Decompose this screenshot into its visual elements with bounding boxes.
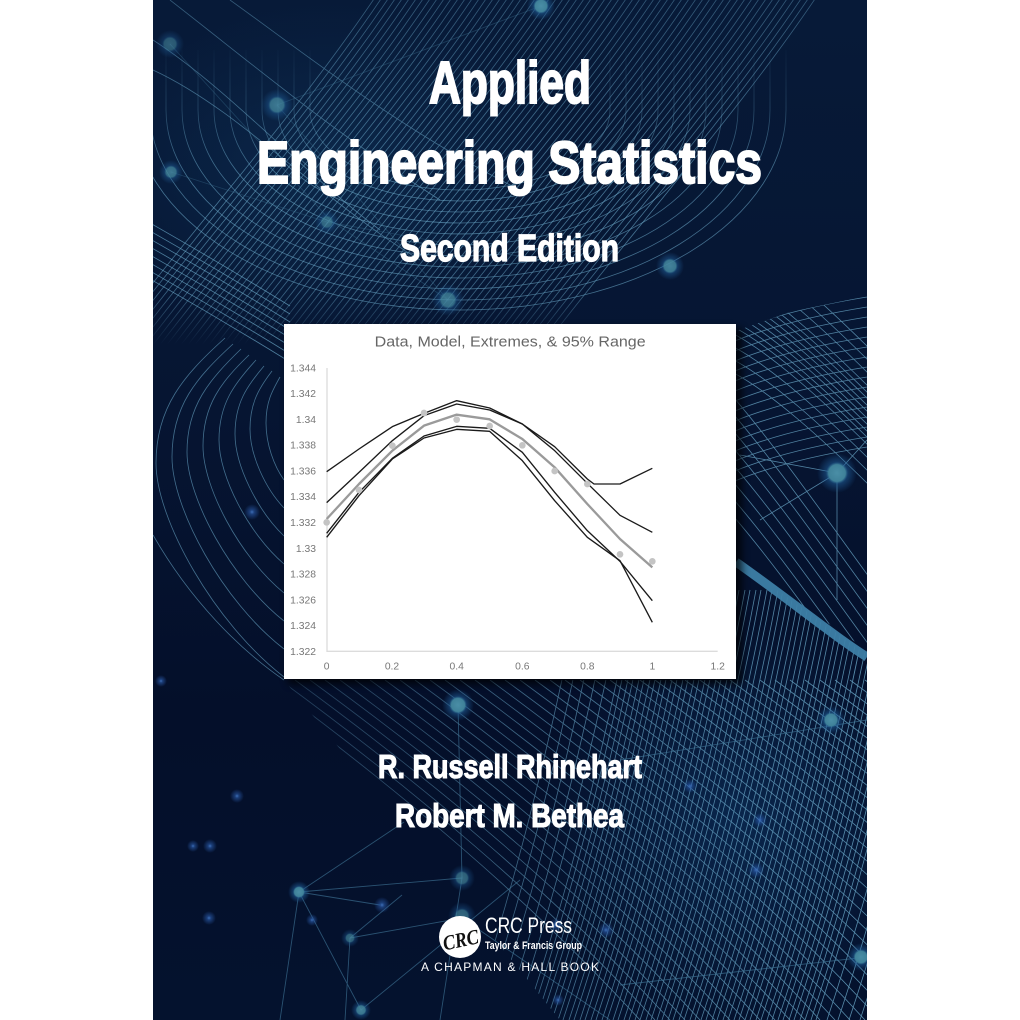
bottom right mesh — [289, 590, 867, 1020]
publisher logo: CRC Press — [485, 913, 572, 938]
y axis labels: 1.33 — [296, 544, 316, 555]
y axis labels: 1.344 — [290, 363, 316, 374]
x axis labels: 0.8 — [580, 662, 595, 673]
y axis labels: 1.342 — [290, 389, 316, 400]
title — [257, 50, 762, 196]
x axis labels: 0 — [324, 662, 330, 673]
chart title: Data, Model, Extremes, & 95% Range — [375, 335, 646, 351]
subtitle: second edition: Second Edition — [400, 228, 619, 270]
y axis labels: 1.322 — [290, 647, 316, 658]
glowing nodes — [155, 0, 875, 1020]
authors: Robert M. Bethea — [395, 797, 625, 834]
x axis labels: 0.4 — [449, 662, 464, 673]
left curved lines — [153, 338, 284, 680]
concentric arcs — [134, 50, 786, 310]
y axis labels: 1.332 — [290, 518, 316, 529]
right mesh — [736, 296, 867, 643]
publisher logo: CRC — [441, 924, 482, 955]
y axis labels: 1.336 — [290, 466, 316, 477]
y axis labels: 1.328 — [290, 569, 316, 580]
network lines — [280, 705, 867, 1020]
axes — [327, 368, 718, 651]
panel: line chart — [284, 324, 742, 684]
authors: R. Russell Rhinehart — [378, 748, 642, 785]
publisher logo — [421, 913, 599, 974]
y axis labels: 1.324 — [290, 621, 316, 632]
x axis labels: 0.2 — [385, 662, 399, 673]
right band — [736, 562, 867, 657]
x axis labels: 0.6 — [515, 662, 530, 673]
y axis labels — [290, 363, 316, 658]
y axis labels: 1.338 — [290, 440, 316, 451]
y axis labels: 1.326 — [290, 595, 316, 606]
fan above left of chart — [153, 224, 290, 359]
authors — [378, 748, 642, 834]
data points — [323, 410, 656, 565]
x axis labels: 1.2 — [710, 662, 725, 673]
publisher logo: A CHAPMAN & HALL BOOK — [421, 960, 599, 974]
publisher logo: Taylor & Francis Group — [485, 940, 582, 952]
top mesh — [153, 0, 815, 339]
data series — [327, 401, 652, 622]
book cover — [153, 0, 867, 1020]
y axis labels: 1.34 — [296, 415, 316, 426]
title: Engineering Statistics — [257, 130, 762, 196]
y axis labels: 1.334 — [290, 492, 316, 503]
cover background — [153, 0, 867, 1020]
title: Applied — [429, 50, 591, 116]
x axis labels — [324, 662, 725, 673]
model line — [327, 415, 652, 567]
x axis labels: 1 — [649, 662, 655, 673]
